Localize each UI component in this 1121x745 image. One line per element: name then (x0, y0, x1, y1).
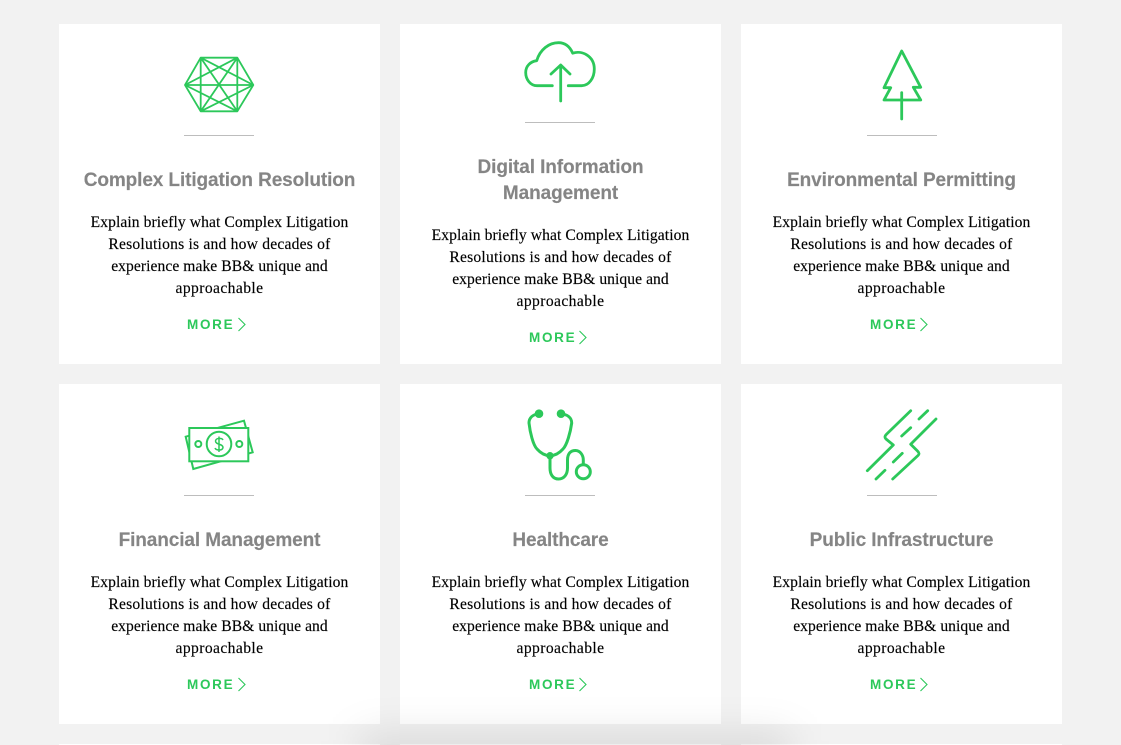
divider (184, 495, 254, 496)
description: experience make BB& unique and (452, 271, 669, 288)
description: approachable (517, 293, 604, 310)
icon: cloud upload (524, 41, 596, 102)
description: Explain briefly what Complex Litigation (773, 214, 1030, 231)
description: approachable (858, 280, 945, 297)
link: more: MORE (187, 677, 234, 692)
heading: Healthcare (512, 530, 609, 551)
description: experience make BB& unique and (111, 258, 328, 275)
heading: Environmental Permitting (787, 170, 1016, 191)
link: more: MORE (870, 317, 917, 332)
description: Explain briefly what Complex Litigation (773, 574, 1030, 591)
panel: Environmental Permitting (741, 24, 1062, 364)
divider (525, 122, 595, 123)
icon: road (866, 409, 938, 480)
description: Explain briefly what Complex Litigation (91, 214, 348, 231)
heading: Complex Litigation Resolution (84, 170, 355, 191)
description: approachable (176, 640, 263, 657)
description (91, 214, 348, 297)
heading: Digital Information (478, 157, 643, 178)
description: Resolutions is and how decades of (790, 596, 1013, 613)
description: approachable (517, 640, 604, 657)
panel: Financial Management (59, 384, 380, 724)
description (773, 574, 1030, 657)
description: approachable (176, 280, 263, 297)
link: more: MORE (187, 317, 234, 332)
panel: Digital Information Management (400, 24, 721, 364)
icon: pine tree (882, 50, 922, 120)
description: Resolutions is and how decades of (449, 249, 672, 266)
panel: Public Infrastructure (741, 384, 1062, 724)
description: Resolutions is and how decades of (108, 236, 331, 253)
description (773, 214, 1030, 297)
description: approachable (858, 640, 945, 657)
description: experience make BB& unique and (452, 618, 669, 635)
description: Explain briefly what Complex Litigation (432, 227, 689, 244)
link: more: MORE (529, 677, 576, 692)
divider (525, 495, 595, 496)
description (432, 227, 690, 310)
panel: Complex Litigation Resolution (59, 24, 380, 364)
description: Resolutions is and how decades of (108, 596, 331, 613)
description: Resolutions is and how decades of (790, 236, 1013, 253)
icon: hexagon network (184, 56, 254, 112)
link: more: MORE (870, 677, 917, 692)
heading: Management (503, 183, 618, 204)
panel: Healthcare (400, 384, 721, 724)
link: more: MORE (529, 330, 576, 345)
divider (184, 135, 254, 136)
description: Explain briefly what Complex Litigation (432, 574, 689, 591)
heading: Public Infrastructure (810, 530, 993, 551)
description: Explain briefly what Complex Litigation (91, 574, 348, 591)
icon: stethoscope (528, 409, 592, 480)
description: Resolutions is and how decades of (449, 596, 672, 613)
divider (867, 495, 937, 496)
divider (867, 135, 937, 136)
description (432, 574, 690, 657)
heading (478, 157, 643, 204)
heading: Financial Management (119, 530, 320, 551)
description (91, 574, 348, 657)
description: experience make BB& unique and (111, 618, 328, 635)
icon: banknotes (184, 420, 254, 470)
description: experience make BB& unique and (793, 258, 1010, 275)
description: experience make BB& unique and (793, 618, 1010, 635)
